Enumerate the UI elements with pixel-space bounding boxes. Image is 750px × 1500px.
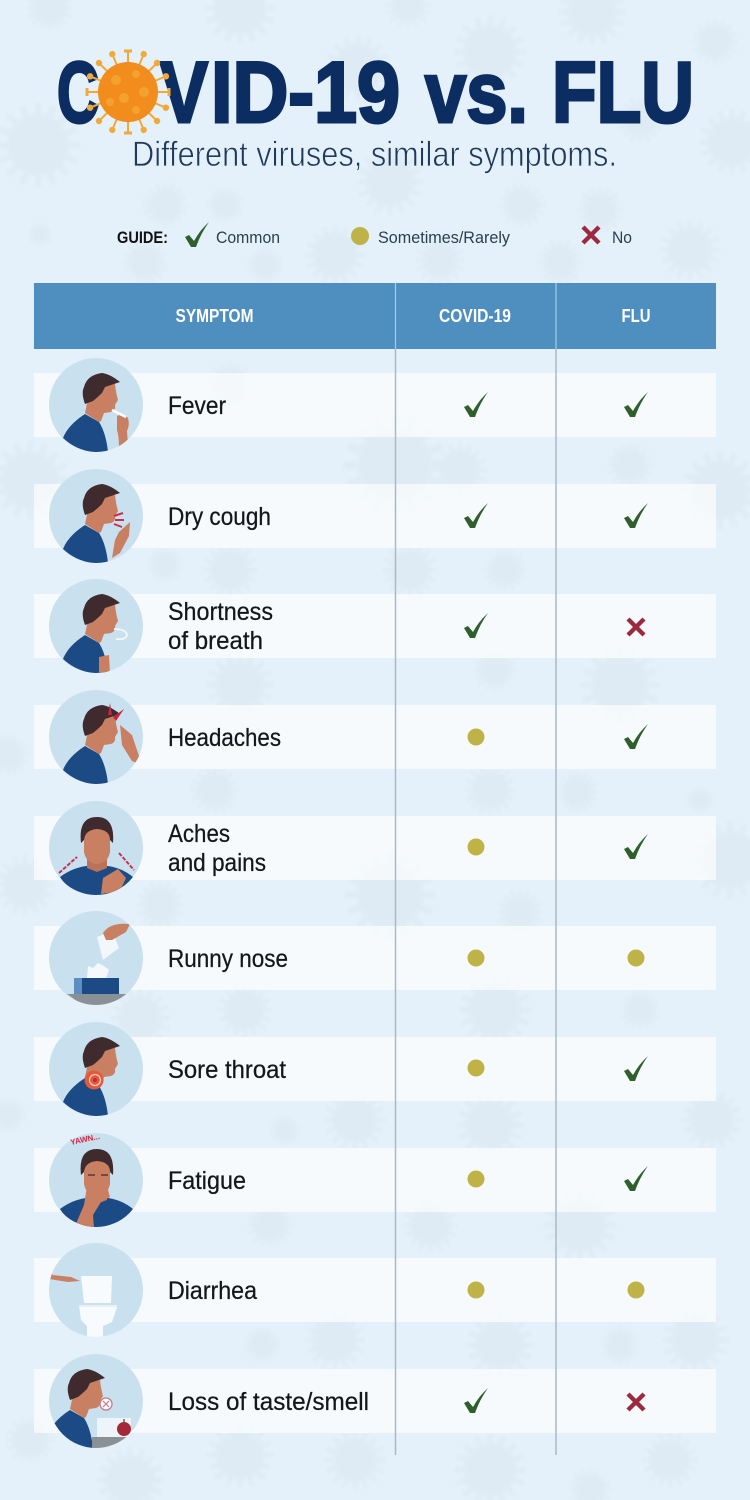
row: Fever: Fever — [168, 392, 226, 420]
title — [57, 45, 694, 141]
icon: man unable to smell apple — [48, 1354, 143, 1449]
legend guide: Sometimes/Rarely — [378, 228, 510, 247]
legend guide: No — [612, 228, 632, 247]
icon: man with headache — [49, 690, 143, 784]
legend guide — [117, 222, 632, 247]
icon: man short of breath — [49, 579, 143, 673]
legend guide: GUIDE: — [117, 228, 168, 247]
icon: man yawning — [49, 1132, 143, 1228]
icon: man with aching shoulders — [49, 801, 143, 896]
row: Sore throat: Sore throat — [168, 1056, 286, 1084]
icon: man with sore throat — [49, 1022, 143, 1116]
icon: orange virus replacing the O — [87, 51, 169, 133]
row: Fatigue: Fatigue — [168, 1167, 246, 1195]
table header: FLU — [622, 306, 650, 326]
row: Shortness of breath — [49, 579, 644, 673]
icon: legend check — [185, 222, 209, 247]
row: Dry cough — [49, 469, 648, 563]
row: Headaches: Headaches — [168, 724, 281, 752]
title: V — [160, 45, 208, 141]
row: Runny nose — [49, 911, 644, 1006]
row: Headaches — [49, 690, 648, 784]
row: Diarrhea: Diarrhea — [168, 1277, 257, 1305]
table header: COVID-19 — [439, 306, 511, 326]
row: Loss of taste/smell: Loss of taste/smell — [168, 1388, 369, 1416]
icon: man yawning: YAWN... — [70, 1132, 101, 1147]
row: Aches and pains — [49, 801, 648, 896]
row background bands — [34, 373, 716, 1433]
legend guide: Common — [216, 228, 280, 247]
table header — [34, 283, 716, 349]
row: Sore throat — [49, 1022, 648, 1116]
row: Shortness of breath: Shortness — [168, 598, 273, 626]
table header: SYMPTOM — [176, 306, 254, 326]
title: ID-19 — [211, 45, 400, 141]
row: Fever — [49, 358, 648, 452]
icon: man with thermometer — [49, 358, 143, 452]
title: C — [57, 45, 99, 141]
title: FLU — [552, 45, 694, 141]
icon: toilet — [49, 1243, 143, 1337]
row: Aches and pains: Aches — [168, 820, 230, 848]
row: Runny nose: Runny nose — [168, 945, 288, 973]
row: Loss of taste/smell — [48, 1354, 644, 1449]
title: vs. — [425, 45, 528, 141]
row: Shortness of breath: of breath — [168, 627, 263, 655]
row: Diarrhea — [49, 1243, 644, 1337]
icon: tissue box — [49, 911, 143, 1006]
icon: legend cross — [583, 227, 599, 243]
icon: man coughing — [49, 469, 143, 563]
row: Fatigue — [49, 1132, 648, 1228]
row: Dry cough: Dry cough — [168, 503, 271, 531]
icon: legend dot — [351, 227, 369, 245]
row: Aches and pains: and pains — [168, 849, 266, 877]
subtitle: Different viruses, similar symptoms. — [132, 135, 617, 174]
